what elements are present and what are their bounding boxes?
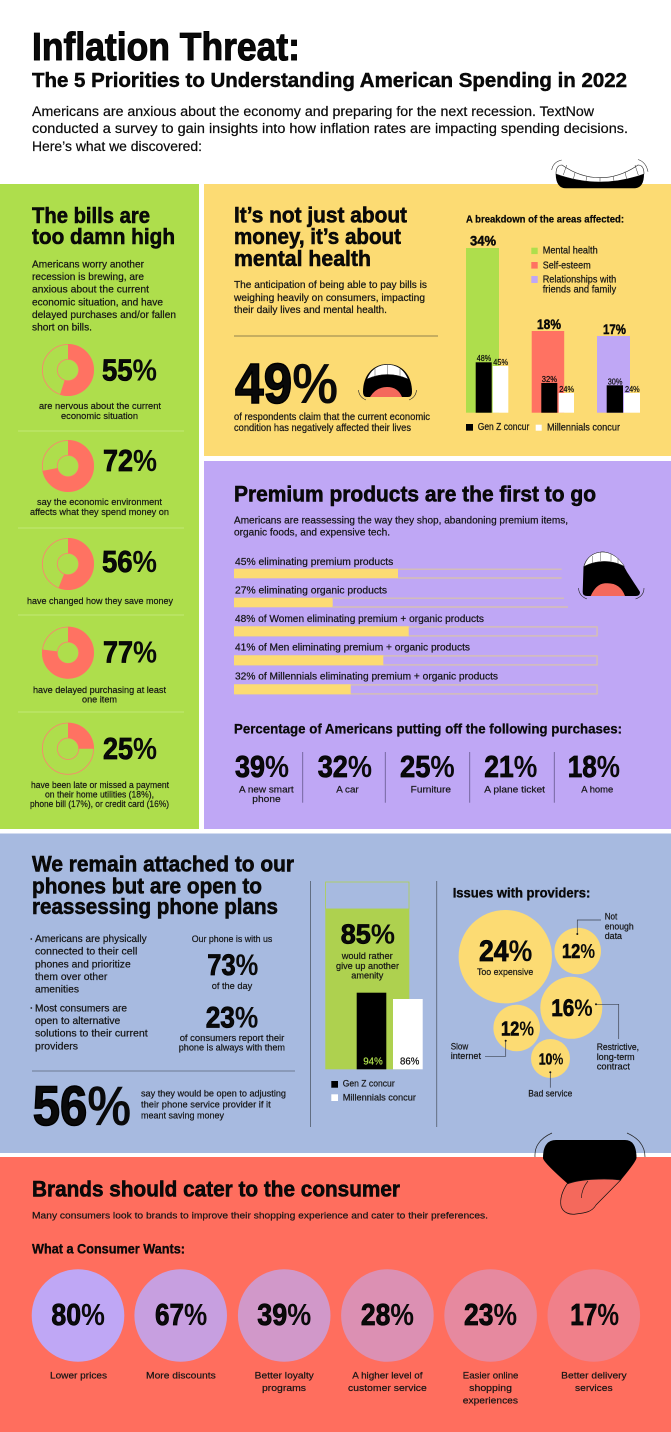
bar chart: areas affected: 34% bbox=[470, 233, 497, 249]
caption: 77%: have delayed purchasing at least bbox=[33, 685, 166, 696]
text: bills intro: short on bills. bbox=[32, 322, 92, 334]
heading: what a consumer wants: What a Consumer Wants: bbox=[32, 1242, 185, 1257]
chart: 85% amenity column: 86% bbox=[400, 1056, 419, 1067]
header bbox=[32, 26, 628, 154]
want: easier online shopping: Easier online bbox=[463, 1370, 518, 1381]
text: bills intro: Americans worry another bbox=[32, 258, 144, 270]
stat: 73% of the day: Our phone is with us bbox=[192, 934, 272, 945]
heading: bills bbox=[32, 203, 175, 249]
want: better delivery bbox=[548, 1269, 640, 1394]
want: lower prices: 80% bbox=[51, 1297, 105, 1332]
caption: 49% bbox=[234, 411, 430, 434]
legend: areas: friends and family bbox=[543, 283, 617, 295]
donut: 25% bbox=[42, 723, 94, 774]
legend: amenity column bbox=[331, 1079, 417, 1103]
caption: 56%: say they would be open to adjusting bbox=[141, 1089, 286, 1100]
stat: 23% always: 23% bbox=[206, 1001, 258, 1034]
bubble chart: issues: long-term bbox=[597, 1052, 635, 1063]
bullet list: them over other bbox=[35, 971, 108, 983]
want: better loyalty programs bbox=[238, 1269, 330, 1394]
caption: 49%: condition has negatively affected their lives bbox=[234, 422, 411, 434]
legend: amenity column: Millennials concur bbox=[343, 1092, 417, 1103]
caption: 56%: their phone service provider if it bbox=[141, 1099, 271, 1110]
stat: new smart phone: A new smart bbox=[239, 784, 294, 795]
want: easier online shopping: shopping bbox=[469, 1383, 512, 1394]
want: better delivery: Better delivery bbox=[561, 1370, 627, 1381]
want: lower prices: Lower prices bbox=[50, 1370, 107, 1381]
text: brands intro: Many consumers look to brands to improve their shopping experience and cater to their preferences. bbox=[32, 1210, 488, 1221]
bar: 27% organic: 27% eliminating organic products bbox=[235, 585, 387, 597]
bar chart: areas affected: 24% bbox=[559, 385, 574, 394]
bar: 41% men bbox=[234, 642, 597, 665]
heading: bills: too damn high bbox=[32, 224, 175, 249]
stat: new smart phone bbox=[235, 749, 294, 805]
heading: phones: phones but are open to bbox=[32, 873, 262, 898]
panel: phones bbox=[0, 834, 671, 1153]
legend: generations bbox=[466, 421, 620, 434]
bar chart: areas affected: 17% bbox=[603, 321, 626, 337]
intro text: Americans are anxious about the economy and preparing for the next recession. TextNow bbox=[32, 104, 594, 119]
heading: putting off purchases: Percentage of Americans putting off the following purchases: bbox=[234, 720, 622, 736]
text: bills intro: anxious about the current bbox=[32, 284, 149, 296]
heading: phones: We remain attached to our bbox=[32, 852, 294, 877]
text: bills intro: economic situation, and have bbox=[32, 296, 163, 308]
stat: new smart phone: phone bbox=[252, 794, 281, 805]
bar: 32% millennials bbox=[234, 670, 597, 694]
icon: tongue out mouth bbox=[535, 1133, 645, 1214]
stat: car: A car bbox=[336, 784, 360, 795]
want: better loyalty programs: 39% bbox=[257, 1297, 311, 1332]
caption: 72%: say the economic environment bbox=[37, 497, 162, 508]
bubble chart: issues bbox=[451, 910, 639, 1099]
bullet list: amenities bbox=[35, 984, 79, 996]
heading: brands: Brands should cater to the consumer bbox=[32, 1177, 400, 1202]
donut: 72% bbox=[42, 440, 94, 492]
heading: phones: reassessing phone plans bbox=[32, 894, 278, 919]
caption: 25%: on their home utilities (18%), bbox=[45, 790, 154, 800]
want: better loyalty programs: programs bbox=[262, 1383, 306, 1394]
stat: 23% always: phone is always with them bbox=[179, 1043, 285, 1054]
want: easier online shopping: 23% bbox=[464, 1297, 517, 1332]
heading: issues with providers: Issues with providers: bbox=[453, 885, 590, 900]
want: customer service: 28% bbox=[361, 1297, 414, 1332]
heading: phones bbox=[32, 852, 294, 919]
stat: 23% always: of consumers report their bbox=[180, 1033, 285, 1044]
panel: brands bbox=[0, 1157, 671, 1432]
caption: 25% bbox=[30, 780, 169, 810]
bar chart: areas affected bbox=[466, 215, 640, 434]
bar: 48% women: 48% of Women eliminating premium + organic products bbox=[235, 613, 484, 625]
bubble chart: issues: Not bbox=[605, 911, 618, 922]
want: better delivery: services bbox=[575, 1383, 613, 1394]
panel: premium products bbox=[204, 461, 671, 829]
donut: 56% bbox=[42, 538, 94, 590]
legend: areas bbox=[531, 245, 617, 295]
bar: 41% men: 41% of Men eliminating premium + organic products bbox=[235, 642, 470, 654]
want: easier online shopping: experiences bbox=[463, 1396, 518, 1407]
subtitle: The 5 Priorities to Understanding American Spending in 2022 bbox=[32, 70, 627, 92]
bar: 32% millennials: 32% of Millennials eliminating premium + organic products bbox=[235, 670, 498, 682]
stat: 56%: 56% bbox=[33, 1074, 131, 1137]
bubble chart: issues: 24% bbox=[479, 935, 532, 968]
text: premium intro: Americans are reassessing the way they shop, abandoning premium items, bbox=[234, 514, 568, 526]
heading: mental health: It’s not just about bbox=[234, 203, 408, 228]
legend: amenity column: Gen Z concur bbox=[343, 1079, 395, 1090]
icon: smiling mouth bbox=[552, 160, 648, 188]
bullet list: Most consumers are bbox=[35, 1002, 127, 1014]
legend: areas: Self-esteem bbox=[543, 259, 591, 271]
stat: plane ticket: A plane ticket bbox=[484, 784, 545, 795]
caption: 49%: of respondents claim that the current economic bbox=[234, 411, 430, 423]
stat: 23% always bbox=[179, 1001, 285, 1054]
panel: bills bbox=[0, 184, 199, 829]
heading: premium products: Premium products are the first to go bbox=[234, 482, 596, 507]
bubble chart: issues: Slow bbox=[451, 1041, 468, 1052]
bar chart: areas affected: 18% bbox=[537, 316, 561, 332]
heading: mental health bbox=[234, 203, 408, 271]
stat: home: A home bbox=[581, 784, 613, 795]
caption: 77%: one item bbox=[82, 694, 117, 706]
bubble chart: issues: 12% bbox=[562, 941, 595, 963]
text: mental health intro: their daily lives and mental health. bbox=[234, 304, 387, 316]
want: better loyalty programs: Better loyalty bbox=[255, 1370, 314, 1381]
chart title: A breakdown of the areas affected: bbox=[466, 215, 624, 226]
heading: bills: The bills are bbox=[32, 203, 150, 228]
heading: mental health: mental health bbox=[234, 246, 371, 271]
bubble chart: issues: 10% bbox=[539, 1051, 563, 1068]
want: lower prices bbox=[32, 1269, 124, 1381]
stat: 73% of the day: 73% bbox=[207, 949, 258, 982]
bullet list: phones and prioritize bbox=[35, 958, 131, 970]
want: more discounts bbox=[134, 1269, 227, 1381]
panel: mental health bbox=[204, 184, 671, 456]
want: more discounts: More discounts bbox=[146, 1370, 216, 1381]
text: mental health intro: weighing heavily on consumers, impacting bbox=[233, 292, 425, 304]
stat: 25%: 25% bbox=[103, 731, 157, 766]
stat: car: 32% bbox=[318, 749, 372, 784]
stat: furniture: Furniture bbox=[411, 784, 451, 795]
legend: generations: Millennials concur bbox=[547, 422, 620, 434]
donut: 55% bbox=[42, 344, 94, 396]
intro text bbox=[32, 104, 628, 154]
want: customer service: A higher level of bbox=[352, 1370, 423, 1381]
stat: 73% of the day: of the day bbox=[212, 981, 252, 992]
icon: shouting mouth bbox=[578, 552, 644, 599]
bubble chart: issues: 16% bbox=[551, 995, 593, 1022]
bar chart: areas affected: 48% bbox=[477, 354, 491, 363]
text: bills intro: delayed purchases and/or fallen bbox=[32, 309, 176, 321]
caption: 56%: have changed how they save money bbox=[27, 596, 173, 607]
bullet list: connected to their cell bbox=[35, 946, 137, 958]
caption: 55% bbox=[39, 401, 161, 422]
caption: 56% bbox=[141, 1089, 286, 1121]
caption: 55%: economic situation bbox=[61, 411, 138, 422]
text: bills intro bbox=[32, 258, 176, 334]
bullet list: Americans are physically bbox=[35, 933, 147, 945]
bullet list: providers bbox=[35, 1040, 78, 1052]
caption: 56%: meant saving money bbox=[141, 1110, 224, 1121]
bar: 45% premium bbox=[234, 556, 562, 578]
caption: 72% bbox=[30, 497, 169, 518]
bubble chart: issues: Bad service bbox=[528, 1088, 572, 1099]
text: premium intro bbox=[234, 514, 568, 539]
text: bills intro: recession is brewing, are bbox=[32, 271, 144, 283]
caption: 25%: have been late or missed a payment bbox=[31, 780, 169, 791]
bubble chart: issues: Too expensive bbox=[477, 967, 533, 978]
chart: 85% amenity column: would rather bbox=[341, 951, 393, 962]
stat: 56%: 56% bbox=[102, 544, 157, 579]
text: mental health intro: The anticipation of being able to pay bills is bbox=[234, 279, 427, 291]
bar: 45% premium: 45% eliminating premium products bbox=[235, 556, 393, 568]
bubble chart: issues: data bbox=[605, 931, 623, 942]
donut: 77% bbox=[42, 627, 94, 679]
legend: areas: Mental health bbox=[543, 245, 598, 257]
chart: 85% amenity column: 94% bbox=[363, 1056, 383, 1067]
heading: mental health: money, it’s about bbox=[234, 224, 402, 249]
stat: home: 18% bbox=[568, 749, 620, 784]
stat: 73% of the day bbox=[192, 934, 272, 992]
chart: 85% amenity column: give up another bbox=[336, 961, 400, 972]
bullet list bbox=[30, 933, 148, 1052]
icon: open mouth bbox=[358, 364, 416, 400]
bubble chart: issues: 12% bbox=[501, 1018, 534, 1040]
bar: 48% women bbox=[234, 613, 597, 636]
bubble chart: issues: Restrictive, bbox=[597, 1042, 639, 1053]
stat: plane ticket: 21% bbox=[484, 749, 537, 784]
want: customer service bbox=[341, 1269, 434, 1394]
bullet list: solutions to their current bbox=[35, 1028, 148, 1040]
bubble chart: issues: contract bbox=[597, 1062, 630, 1073]
bubble chart: issues: enough bbox=[605, 921, 634, 932]
bar chart: areas affected: 24% bbox=[625, 385, 640, 394]
bubble chart: issues: internet bbox=[451, 1051, 481, 1062]
chart: 85% amenity column: 85% bbox=[341, 918, 395, 949]
caption: 25%: phone bill (17%), or credit card (16%) bbox=[30, 799, 169, 810]
stat: 55%: 55% bbox=[102, 353, 157, 388]
caption: 77% bbox=[33, 685, 166, 706]
title: Inflation Threat: bbox=[32, 26, 300, 69]
stat: 49%: 49% bbox=[235, 352, 338, 416]
chart: 85% amenity column bbox=[325, 882, 423, 1069]
stat: 72%: 72% bbox=[103, 443, 157, 478]
chart: 85% amenity column: amenity bbox=[351, 971, 383, 982]
caption: 55%: are nervous about the current bbox=[39, 401, 161, 412]
bar chart: areas affected: 30% bbox=[608, 377, 622, 386]
stat: new smart phone: 39% bbox=[235, 749, 289, 784]
intro text: Here’s what we discovered: bbox=[32, 139, 202, 154]
legend: generations: Gen Z concur bbox=[478, 421, 530, 433]
bullet list: open to alternative bbox=[35, 1015, 120, 1027]
want: customer service: customer service bbox=[348, 1383, 427, 1394]
text: mental health intro bbox=[233, 279, 427, 316]
caption: 72%: affects what they spend money on bbox=[30, 507, 169, 518]
text: premium intro: organic foods, and expensive tech. bbox=[234, 527, 390, 539]
stat: 77%: 77% bbox=[103, 635, 157, 670]
bar chart: areas affected: 32% bbox=[542, 375, 557, 384]
stat: furniture: 25% bbox=[400, 749, 455, 784]
want: better delivery: 17% bbox=[570, 1297, 619, 1332]
bar: 27% organic bbox=[234, 585, 568, 607]
intro text: conducted a survey to gain insights into how inflation rates are impacting spending decisions. bbox=[32, 121, 628, 136]
want: easier online shopping bbox=[444, 1269, 537, 1407]
want: more discounts: 67% bbox=[155, 1297, 207, 1332]
legend: areas: Relationships with bbox=[543, 273, 616, 285]
bar chart: areas affected: 45% bbox=[493, 358, 508, 367]
